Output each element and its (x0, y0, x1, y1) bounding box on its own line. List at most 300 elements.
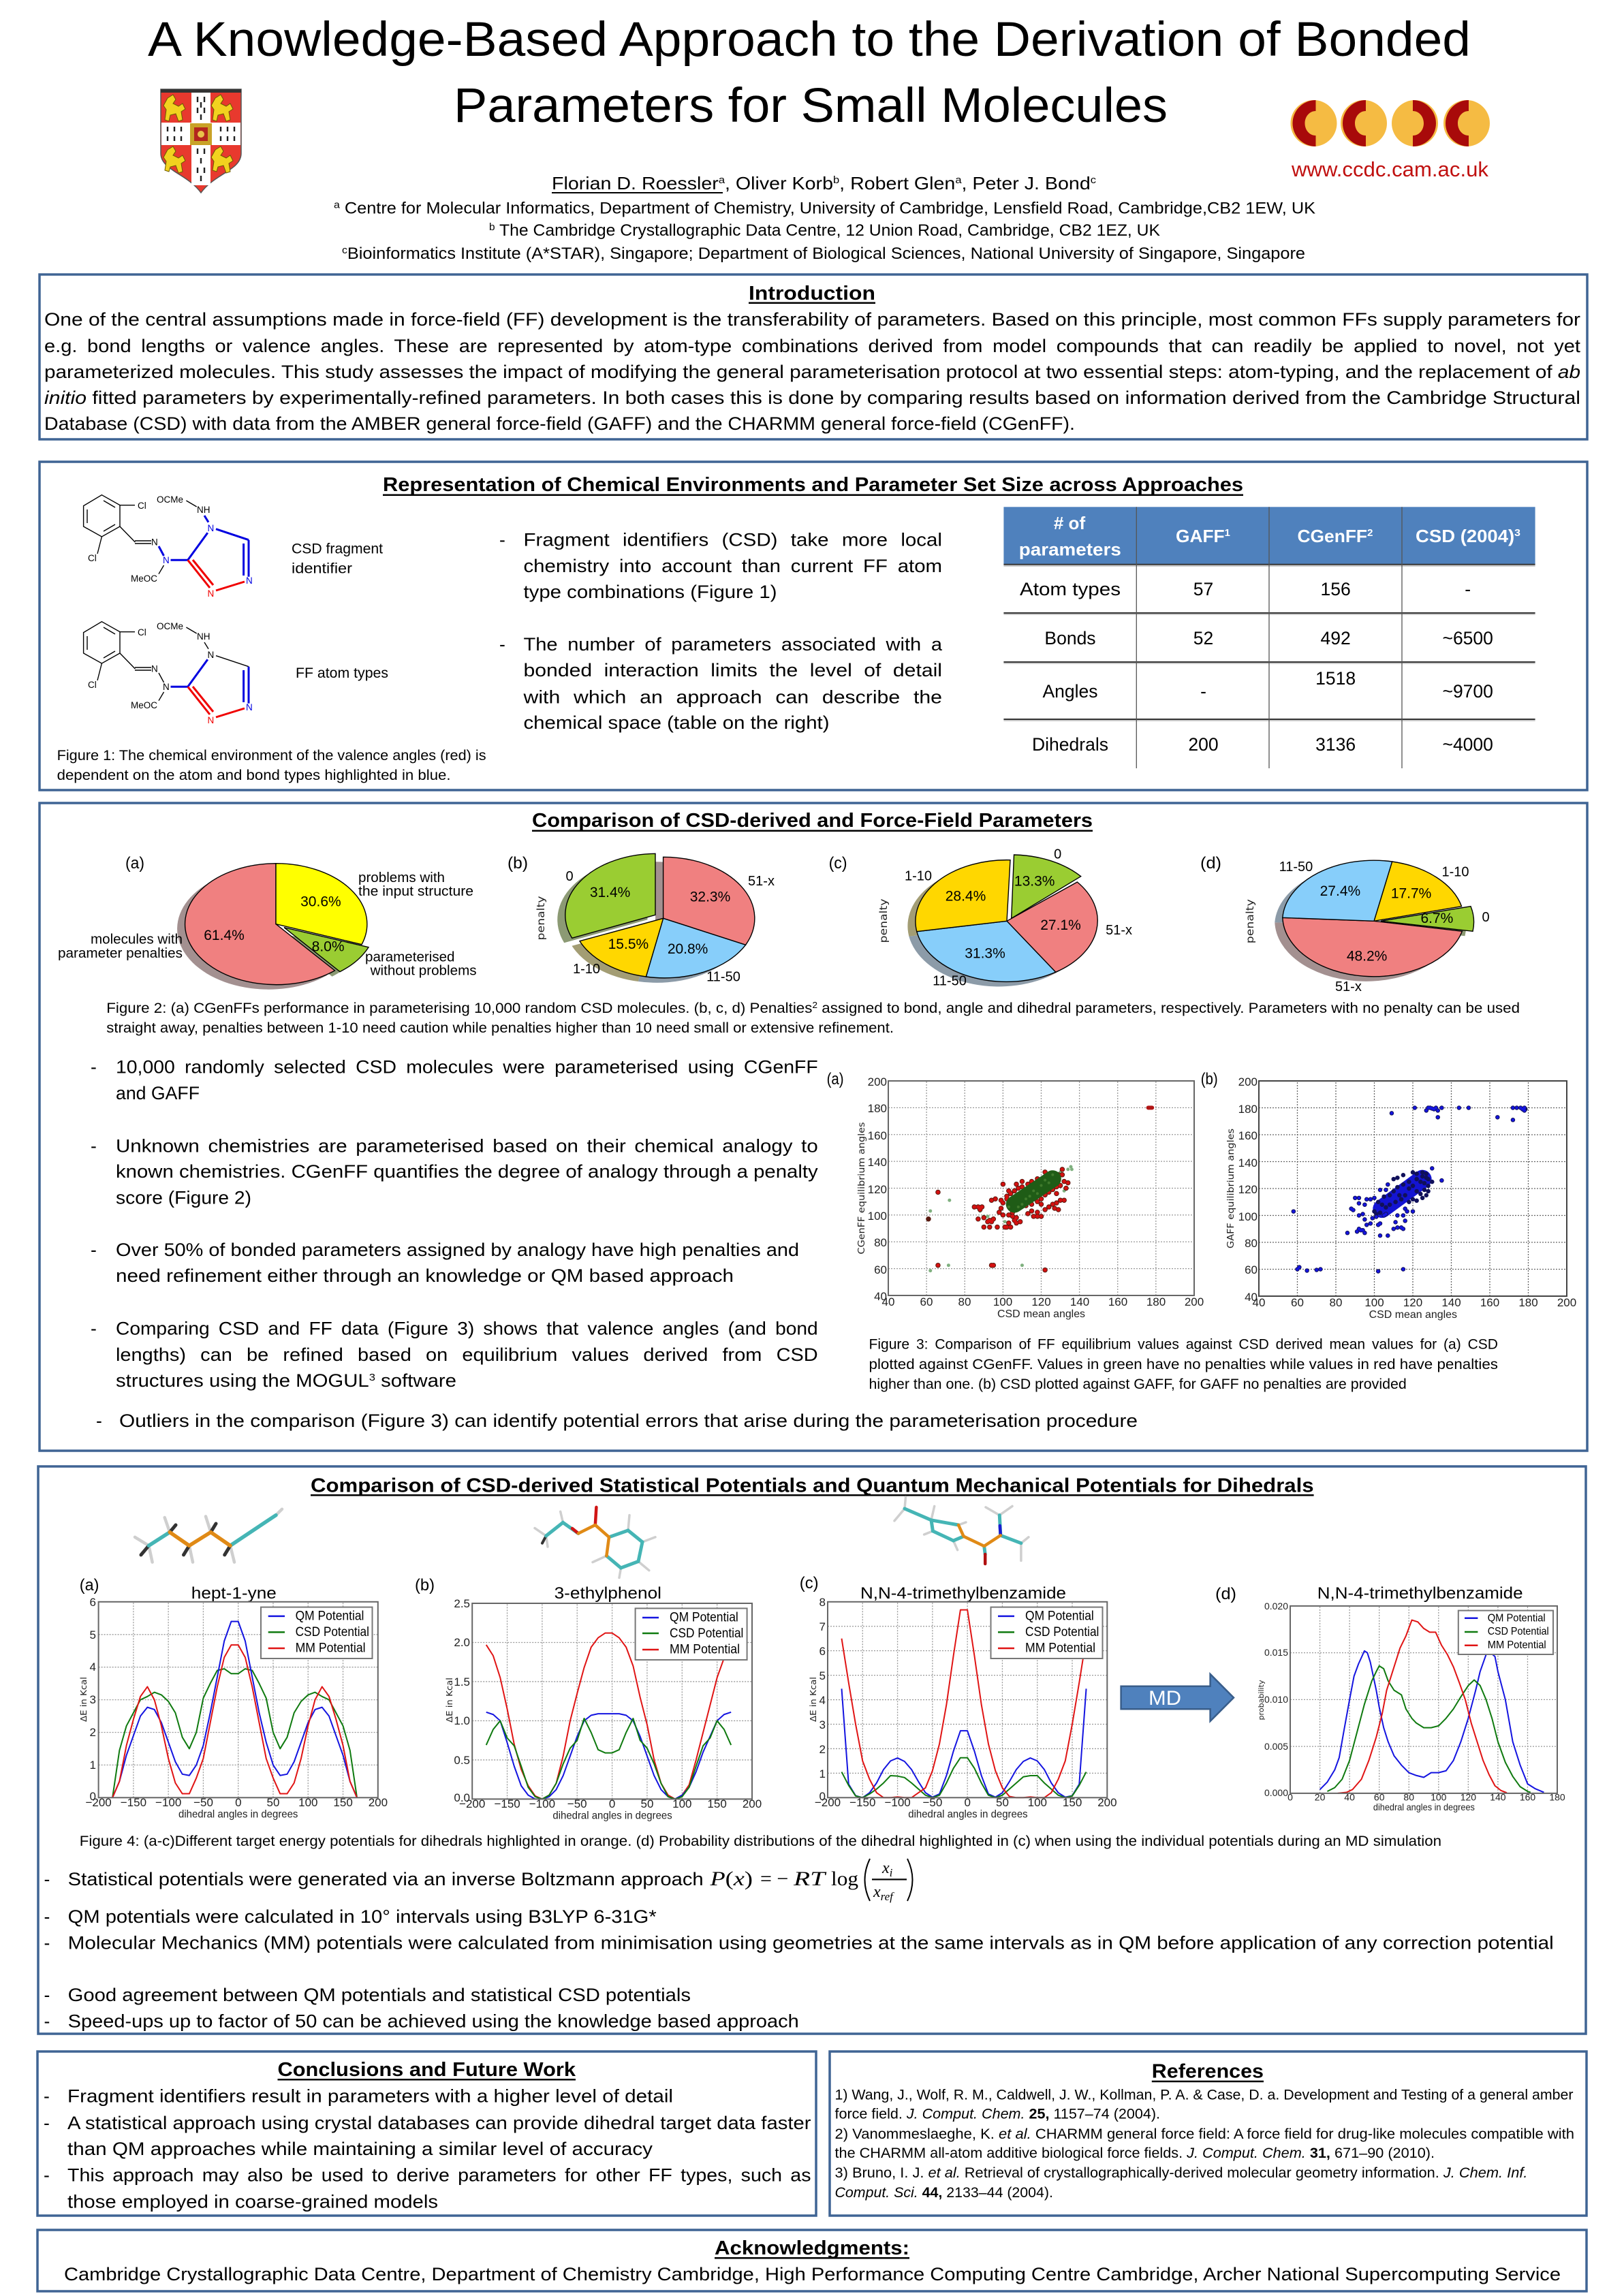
line chart (b): 3-ethylphenol: 50 (641, 1797, 653, 1810)
line chart (a): hept-1-yne: 2 (90, 1726, 96, 1739)
pie chart (a) (58, 854, 477, 990)
caption: figure 4: Figure 4: (a-c)Different target energy potentials for dihedrals highlighted in orange. (d) Probability distributions of the dihedral highlighted in (c) when using the individual potentials during an MD simulation (80, 1834, 1441, 1849)
line chart (b): 3-ethylphenol: 0.0 (454, 1791, 470, 1804)
line chart (a): hept-1-yne: 150 (333, 1796, 353, 1809)
text block: fragment identifier bullets: Fragment identifiers (CSD) take more local (523, 530, 942, 550)
icon: University of Cambridge shield (161, 89, 241, 193)
line chart (c): N,N-4-trimethylbenzamide: 200 (1097, 1796, 1117, 1809)
line chart (b): 3-ethylphenol: 0 (609, 1797, 615, 1810)
affiliations: a (334, 199, 340, 211)
chemical structure: FF atom types: Cl (88, 680, 97, 690)
scatter plot (b): CSD vs GAFF: 100 (1238, 1210, 1258, 1223)
scatter plot (b): CSD vs GAFF: 200 (1238, 1075, 1258, 1088)
line chart (d): probability distributions: (d) (1215, 1585, 1236, 1603)
caption: figure 1: dependent on the atom and bond types highlighted in blue. (57, 768, 451, 783)
line chart (d): probability distributions: 0 (1287, 1792, 1293, 1803)
chemical structure: CSD fragment identifier: N (163, 555, 170, 565)
line chart (d): probability distributions: dihedral angles in degrees (1373, 1802, 1475, 1812)
line chart (b): 3-ethylphenol: 200 (743, 1797, 762, 1810)
pie chart (c): 1-10 (905, 869, 932, 884)
title: A Knowledge-Based Approach to the Derivation of Bonded (148, 13, 1471, 67)
line chart (a): hept-1-yne: 0 (90, 1790, 96, 1803)
line chart (a): hept-1-yne: (a) (80, 1576, 99, 1594)
line chart (d): probability distributions: 160 (1520, 1792, 1535, 1803)
line chart (d): probability distributions: CSD Potential (1488, 1626, 1549, 1637)
formula: inverse Boltzmann: RT (793, 1868, 827, 1890)
authors: , Peter J. Bond (962, 173, 1091, 193)
line chart (a): hept-1-yne: MM Potential (296, 1641, 366, 1656)
line chart (a): hept-1-yne: 50 (267, 1796, 279, 1809)
formula: inverse Boltzmann (709, 1859, 913, 1903)
text block: introduction body (44, 309, 1581, 434)
table: number of parameters: Dihedrals (1032, 734, 1108, 755)
line chart (a): hept-1-yne: 6 (90, 1596, 96, 1609)
chemical structure: FF atom types: NH (197, 631, 210, 642)
panel: acknowledgments (37, 2230, 1587, 2291)
caption: figure 3: higher than one. (b) CSD plotted against GAFF, for GAFF no penalties are provided (869, 1377, 1407, 1392)
text block: fragment identifier bullets: chemistry into account than current FF atom (523, 556, 942, 576)
label: FF atom types: FF atom types (296, 665, 388, 681)
text block: fragment identifier bullets: chemical space (table on the right) (523, 712, 830, 733)
scatter plot (b): CSD vs GAFF: 120 (1403, 1296, 1422, 1309)
text block: parameterisation bullets: software (375, 1370, 456, 1391)
text block: parameterisation bullets: known chemistries. CGenFF quantifies the degree of analogy through a penalty (116, 1161, 819, 1182)
line chart (d): probability distributions: 100 (1431, 1792, 1447, 1803)
authors: b (833, 174, 839, 186)
scatter plot (b): CSD vs GAFF: 180 (1518, 1296, 1538, 1309)
pie chart (a): 30.6% (300, 894, 341, 910)
text block: parameterisation bullets: Comparing CSD and FF data (Figure 3) shows that valence angles (and bond (116, 1319, 818, 1339)
pie chart (b): 0 (565, 869, 574, 884)
line chart (c): N,N-4-trimethylbenzamide: 1 (819, 1767, 826, 1780)
scatter plot (a): CSD vs CGenFF: 80 (874, 1236, 887, 1249)
pie chart (c): (c) (829, 854, 847, 872)
text block: fragment identifier bullets (499, 530, 942, 733)
line chart (b): 3-ethylphenol: −200 (459, 1797, 485, 1810)
line chart (a): hept-1-yne: QM Potential (296, 1609, 364, 1624)
scatter plot (a): CSD vs CGenFF: 120 (868, 1183, 887, 1196)
line chart (c): N,N-4-trimethylbenzamide: 6 (819, 1645, 826, 1658)
title: Parameters for Small Molecules (454, 79, 1168, 133)
scatter plot (b): CSD vs GAFF: 200 (1557, 1296, 1576, 1309)
table: number of parameters: ~6500 (1442, 628, 1493, 648)
formula: inverse Boltzmann: ref (881, 1890, 894, 1903)
heading: introduction: Introduction (749, 283, 875, 304)
text block: reference list: 2) Vanommeslaeghe, K. et al. CHARMM general force field: A force field for drug-like molecules compatible with (835, 2126, 1574, 2142)
pie chart (a): parameterised (365, 950, 455, 965)
scatter plot (a): CSD vs CGenFF: 180 (868, 1102, 887, 1115)
authors: a (955, 174, 962, 186)
line chart (d): probability distributions: 0.000 (1264, 1787, 1288, 1798)
text block: fragment identifier bullets: type combinations (Figure 1) (523, 582, 777, 602)
icon: CCDC logo (1290, 100, 1490, 181)
table: number of parameters: CSD (2004) (1416, 526, 1509, 546)
text block: fragment identifier bullets: bonded interaction limits the level of detail (523, 660, 942, 680)
text block: potential bullets: - (44, 1906, 50, 1927)
text block: reference list: the CHARMM all-atom additive biological force fields. J. Comput. Chem. 31, 671–90 (2010). (835, 2145, 1435, 2161)
text block: potential bullets: QM potentials were calculated in 10° intervals using B3LYP 6-31G* (68, 1906, 657, 1927)
pie chart (c): penalty (877, 898, 890, 943)
line chart (c): N,N-4-trimethylbenzamide: 0 (819, 1790, 826, 1803)
label: CSD fragment identifier: CSD fragment (292, 541, 383, 557)
line chart (c): N,N-4-trimethylbenzamide: 100 (1028, 1796, 1047, 1809)
chemical structure: FF atom types: MeOC (131, 700, 157, 710)
text block: parameterisation bullets: Outliers in the comparison (Figure 3) can identify potential errors that arise during the parameterisation procedure (119, 1411, 1138, 1431)
line chart (b): 3-ethylphenol: −150 (494, 1797, 520, 1810)
scatter plot (b): CSD vs GAFF: 80 (1330, 1296, 1342, 1309)
table: number of parameters: 2 (1367, 527, 1373, 539)
line chart (a): hept-1-yne (78, 1576, 388, 1821)
text block: fragment identifier bullets: with which an approach can describe the (522, 687, 942, 708)
pie chart (a): molecules with (91, 932, 183, 947)
table: number of parameters: - (1200, 681, 1206, 702)
text block: parameterisation bullets: 3 (369, 1372, 375, 1383)
text block: conclusions bullets: A statistical approach using crystal databases can provide dihedral target data faster (67, 2113, 811, 2133)
pie chart (a): 8.0% (312, 939, 345, 955)
scatter plot (b): CSD vs GAFF: 100 (1364, 1296, 1384, 1309)
line chart (b): 3-ethylphenol: MM Potential (670, 1643, 740, 1657)
formula: inverse Boltzmann: i (890, 1866, 893, 1879)
line chart (d): probability distributions: 80 (1403, 1792, 1414, 1803)
line chart (d): probability distributions: 60 (1374, 1792, 1385, 1803)
label: CSD fragment identifier (292, 541, 383, 577)
line chart (a): hept-1-yne: hept-1-yne (191, 1584, 277, 1603)
line chart (b): 3-ethylphenol: −50 (567, 1797, 587, 1810)
chemical structure: CSD fragment identifier: N (207, 523, 214, 533)
line chart (b): 3-ethylphenol: 0.5 (454, 1754, 470, 1767)
line chart (b): 3-ethylphenol (415, 1576, 762, 1821)
line chart (d): probability distributions: 180 (1549, 1792, 1565, 1803)
authors: Florian D. Roessler (552, 173, 704, 193)
text block: fragment identifier bullets: - (499, 530, 505, 550)
chemical structure: CSD fragment identifier: NH (197, 505, 210, 515)
scatter plot (b): CSD vs GAFF: 140 (1441, 1296, 1461, 1309)
text block: conclusions bullets (44, 2086, 811, 2212)
scatter plot (a): CSD vs CGenFF: 140 (868, 1156, 887, 1169)
heading: comparison of statistical and QM potentials: Comparison of CSD-derived Statistical Potentials and Quantum Mechanical Potentials for Dihedrals (311, 1475, 1314, 1497)
table: number of parameters: CGenFF (1297, 526, 1367, 546)
text block: conclusions bullets: Fragment identifiers result in parameters with a higher level of detail (67, 2086, 673, 2107)
molecule: hept-1-yne (135, 1509, 282, 1562)
pie chart (d): 11-50 (1279, 860, 1313, 875)
text block: introduction body: e.g. bond lengths or valence angles. These are represented by atom-type combinations derived from model compounds that can readily be applied to novel, not yet (44, 336, 1581, 356)
panel: conclusions and future work (37, 2051, 816, 2216)
scatter plot (a): CSD vs CGenFF: 200 (1185, 1295, 1204, 1308)
table: number of parameters: 156 (1320, 579, 1351, 599)
label: CSD fragment identifier: identifier (292, 561, 352, 577)
table: number of parameters: ~4000 (1442, 734, 1493, 755)
text block: potential bullets: Speed-ups up to factor of 50 can be achieved using the knowledge based approach (68, 2011, 799, 2032)
heading: acknowledgments: Acknowledgments: (715, 2237, 909, 2259)
chemical structure: CSD fragment identifier: OCMe (157, 494, 183, 505)
pie chart (d) (1200, 854, 1490, 994)
pie chart (d): 6.7% (1420, 911, 1453, 926)
affiliations: The Cambridge Crystallographic Data Centre, 12 Union Road, Cambridge, CB2 1EZ, UK (495, 221, 1160, 240)
line chart (c): N,N-4-trimethylbenzamide: −200 (815, 1796, 841, 1809)
scatter plot (b): CSD vs GAFF: 40 (1253, 1296, 1265, 1309)
text block: parameterisation bullets: and GAFF (116, 1083, 200, 1103)
text block: introduction body: parameterized molecules. This study assesses the impact of modifying the general parameterisation protocol at two essential steps: atom-typing, and the replacement of ab (44, 362, 1580, 382)
scatter plot (b): CSD vs GAFF (1201, 1070, 1576, 1321)
line chart (b): 3-ethylphenol: CSD Potential (670, 1626, 743, 1641)
authors: a (719, 174, 725, 186)
line chart (b): 3-ethylphenol: ΔE in Kcal (444, 1678, 454, 1723)
line chart (a): hept-1-yne: CSD Potential (296, 1625, 369, 1639)
pie chart (a): without problems (370, 964, 477, 979)
line chart (a): hept-1-yne: ΔE in Kcal (78, 1677, 89, 1722)
affiliations: c (342, 245, 347, 256)
table: number of parameters: - (1465, 579, 1471, 599)
pie chart (c): 28.4% (946, 889, 986, 905)
line chart (b): 3-ethylphenol: 150 (707, 1797, 727, 1810)
caption: figure 2: assigned to bond, angle and dihedral parameters, respectively. Parameters with no penalty can be used (817, 1001, 1520, 1016)
text block: parameterisation bullets (91, 1057, 1138, 1431)
heading: conclusions: Conclusions and Future Work (278, 2059, 576, 2081)
line chart (b): 3-ethylphenol: 3-ethylphenol (555, 1584, 661, 1603)
chemical structure: FF atom types: N (151, 663, 158, 674)
caption: figure 2: Figure 2: (a) CGenFFs performance in parameterising 10,000 random CSD molecules. (b, c, d) Penalties (106, 1001, 770, 1016)
scatter plot (a): CSD vs CGenFF: (a) (827, 1070, 844, 1088)
icon: CCDC logo: www.ccdc.cam.ac.uk (1291, 157, 1488, 181)
chemical structure: CSD fragment identifier: Cl (138, 501, 146, 511)
scatter plot (b): CSD vs GAFF: GAFF equilibrium angles (1226, 1129, 1236, 1248)
scatter plot (a): CSD vs CGenFF: CSD mean angles (997, 1308, 1085, 1320)
panel: statistical and quantum mechanical potentials for dihedrals (38, 1466, 1586, 2034)
pie chart (b): 20.8% (668, 941, 708, 957)
text block: parameterisation bullets: - (91, 1319, 97, 1339)
text block: conclusions bullets: - (44, 2165, 50, 2186)
line chart (c): N,N-4-trimethylbenzamide: −150 (849, 1796, 875, 1809)
chemical structure: FF atom types: N (207, 650, 214, 660)
text block: potential bullets: - (44, 1869, 50, 1889)
text block: parameterisation bullets: - (96, 1411, 102, 1431)
line chart (c): N,N-4-trimethylbenzamide: 4 (819, 1694, 826, 1707)
pie chart (a): the input structure (358, 884, 473, 899)
pie chart (a): 61.4% (204, 928, 245, 943)
chemical structure: FF atom types: OCMe (157, 621, 183, 631)
pie chart (c): 11-50 (933, 974, 967, 989)
scatter plot (a): CSD vs CGenFF: 160 (1108, 1295, 1127, 1308)
scatter plot (a): CSD vs CGenFF: 160 (868, 1129, 887, 1142)
scatter plot (b): CSD vs GAFF: (b) (1201, 1070, 1218, 1088)
line chart (b): 3-ethylphenol: (b) (415, 1576, 435, 1594)
chemical structure: CSD fragment identifier (84, 494, 253, 599)
scatter plot (a): CSD vs CGenFF (827, 1070, 1204, 1320)
line chart (a): hept-1-yne: 3 (90, 1693, 96, 1706)
pie chart (a): problems with (358, 870, 445, 885)
text block: conclusions bullets: those employed in coarse-grained models (67, 2192, 438, 2212)
line chart (c): N,N-4-trimethylbenzamide: QM Potential (1025, 1609, 1094, 1624)
scatter plot (b): CSD vs GAFF: 60 (1291, 1296, 1304, 1309)
text block: parameterisation bullets: 10,000 randomly selected CSD molecules were parameterised using CGenFF (116, 1057, 818, 1078)
line chart (c): N,N-4-trimethylbenzamide: 8 (819, 1596, 826, 1609)
heading: references: References (1152, 2061, 1264, 2083)
line chart (a): hept-1-yne: 1 (90, 1759, 96, 1772)
table: number of parameters (1003, 507, 1535, 768)
line chart (b): 3-ethylphenol: QM Potential (670, 1611, 738, 1625)
molecule: N,N-4-trimethylbenzamide (894, 1497, 1029, 1564)
line chart (a): hept-1-yne: −50 (193, 1796, 213, 1809)
line chart (a): hept-1-yne: 100 (298, 1796, 317, 1809)
caption: figure 1 (57, 748, 486, 783)
arrow: MD: MD (1149, 1687, 1181, 1710)
text block: reference list: 3) Bruno, I. J. et al. Retrieval of crystallographically-derived molecular geometry information. J. Chem. Inf. (835, 2165, 1527, 2181)
chemical structure: FF atom types: Cl (138, 627, 146, 638)
text block: parameterisation bullets: - (91, 1136, 97, 1157)
table: number of parameters: parameters (1019, 539, 1121, 560)
scatter plot (b): CSD vs GAFF: 160 (1238, 1129, 1258, 1142)
affiliations (334, 199, 1315, 263)
formula: inverse Boltzmann: = − (760, 1868, 788, 1890)
arrow: MD (1121, 1674, 1234, 1721)
line chart (d): probability distributions: 0.005 (1264, 1741, 1288, 1752)
line chart (c): N,N-4-trimethylbenzamide: 0 (964, 1796, 971, 1809)
text block: parameterisation bullets: Over 50% of bonded parameters assigned by analogy have high penalties and (116, 1240, 799, 1260)
chemical structure: FF atom types: N (246, 702, 253, 712)
pie chart (c): 51-x (1106, 923, 1132, 938)
line chart (c): N,N-4-trimethylbenzamide: CSD Potential (1025, 1625, 1099, 1639)
pie chart (c): 31.3% (965, 946, 1005, 962)
panel: introduction (40, 274, 1587, 439)
pie chart (d): 0 (1482, 910, 1490, 925)
line chart (a): hept-1-yne: −100 (155, 1796, 181, 1809)
scatter plot (a): CSD vs CGenFF: 120 (1031, 1295, 1051, 1308)
pie chart (a): (a) (125, 854, 144, 872)
line chart (c): N,N-4-trimethylbenzamide: 2 (819, 1743, 826, 1756)
line chart (d): probability distributions (1215, 1584, 1565, 1812)
pie chart (c): 27.1% (1040, 917, 1081, 933)
chemical structure: FF atom types: N (163, 682, 170, 692)
line chart (c): N,N-4-trimethylbenzamide: 7 (819, 1620, 826, 1633)
chemical structure: FF atom types: N (207, 715, 214, 725)
line chart (a): hept-1-yne: 200 (369, 1796, 388, 1809)
line chart (d): probability distributions: 0.010 (1264, 1694, 1288, 1705)
line chart (d): probability distributions: 0.015 (1264, 1647, 1288, 1658)
line chart (d): probability distributions: N,N-4-trimethylbenzamide (1317, 1584, 1523, 1603)
text block: parameterisation bullets: need refinement either through an knowledge or QM based approach (116, 1265, 734, 1286)
line chart (d): probability distributions: MM Potential (1488, 1639, 1546, 1651)
line chart (b): 3-ethylphenol: 1.0 (454, 1714, 470, 1727)
line chart (c): N,N-4-trimethylbenzamide: N,N-4-trimethylbenzamide (860, 1584, 1066, 1603)
text block: reference list: 1) Wang, J., Wolf, R. M., Caldwell, J. W., Kollman, P. A. & Case, D. a. Development and Testing of a general amber (835, 2088, 1574, 2103)
scatter plot (a): CSD vs CGenFF: 40 (882, 1295, 894, 1308)
line chart (d): probability distributions: 40 (1344, 1792, 1355, 1803)
text block: potential bullets: - (44, 1985, 50, 2005)
table: number of parameters: Bonds (1044, 628, 1096, 648)
chemical structure: CSD fragment identifier: N (207, 588, 214, 599)
line chart (b): 3-ethylphenol: 2.5 (454, 1597, 470, 1610)
authors: , Robert Glen (839, 173, 955, 193)
text block: potential bullets: - (44, 2011, 50, 2032)
chemical structure: CSD fragment identifier: N (246, 576, 253, 586)
pie chart (d): 17.7% (1391, 885, 1431, 901)
heading: representation of chemical environments: Representation of Chemical Environments and Parameter Set Size across Approaches (383, 474, 1243, 496)
scatter plot (a): CSD vs CGenFF: 140 (1070, 1295, 1089, 1308)
text block: parameterisation bullets: - (91, 1057, 97, 1078)
text block: parameterisation bullets: structures using the MOGUL (116, 1370, 345, 1391)
line chart (c): N,N-4-trimethylbenzamide: MM Potential (1025, 1641, 1095, 1656)
table: number of parameters: 3136 (1315, 734, 1356, 755)
line chart (b): 3-ethylphenol: 1.5 (454, 1676, 470, 1688)
text block: potential bullets: - (44, 1933, 50, 1953)
line chart (c): N,N-4-trimethylbenzamide: 3 (819, 1718, 826, 1731)
authors: , Oliver Korb (725, 173, 833, 193)
pie chart (b) (507, 853, 775, 985)
text block: parameterisation bullets: - (91, 1240, 97, 1260)
line chart (c): N,N-4-trimethylbenzamide: ΔE in Kcal (808, 1677, 818, 1722)
table: number of parameters: ~9700 (1442, 681, 1493, 702)
scatter plot (b): CSD vs GAFF: 60 (1245, 1263, 1258, 1276)
chemical structure: CSD fragment identifier: N (151, 537, 158, 548)
caption: figure 3: Figure 3: Comparison of FF equilibrium values against CSD derived mean values for (a) CSD (869, 1337, 1498, 1353)
table: number of parameters: Atom types (1020, 579, 1121, 599)
line chart (a): hept-1-yne: 0 (235, 1796, 242, 1809)
text block: reference list (835, 2088, 1574, 2201)
line chart (c): N,N-4-trimethylbenzamide: −100 (884, 1796, 911, 1809)
scatter plot (a): CSD vs CGenFF: 100 (868, 1210, 887, 1223)
line chart (d): probability distributions: probability (1258, 1680, 1266, 1720)
caption: figure 2: straight away, penalties between 1-10 need caution while penalties higher than 10 need small or extensive refinement. (106, 1020, 894, 1036)
table: number of parameters: 200 (1188, 734, 1219, 755)
pie chart (b): penalty (535, 896, 547, 940)
molecule: 3-ethylphenol (535, 1507, 655, 1577)
table: number of parameters: 492 (1320, 628, 1351, 648)
title (148, 13, 1471, 133)
line chart (c): N,N-4-trimethylbenzamide (800, 1574, 1117, 1821)
affiliations: Bioinformatics Institute (A*STAR), Singapore; Department of Biological Sciences, National University of Singapore, Singapore (347, 245, 1305, 263)
pie chart (c) (829, 847, 1132, 989)
line chart (c): N,N-4-trimethylbenzamide: 150 (1063, 1796, 1082, 1809)
text block: acknowledgments: Cambridge Crystallographic Data Centre, Department of Chemistry Cambridge, High Performance Computing Centre Cambridge, Archer National Supercomputing Service (64, 2264, 1561, 2284)
pie chart (d): 27.4% (1320, 883, 1360, 899)
pie chart (b): 32.3% (690, 889, 730, 905)
pie chart (b): 11-50 (706, 970, 740, 985)
authors (552, 173, 1097, 193)
chemical structure: CSD fragment identifier: Cl (88, 553, 97, 563)
pie chart (d): (d) (1200, 854, 1221, 872)
line chart (b): 3-ethylphenol: 100 (672, 1797, 691, 1810)
table: number of parameters: 1 (1225, 527, 1230, 539)
caption: figure 3: plotted against CGenFF. Values in green have no penalties while values in red have penalties (869, 1357, 1498, 1372)
heading: comparison of CSD-derived and force-field parameters: Comparison of CSD-derived and Force-Field Parameters (532, 810, 1093, 832)
scatter plot (a): CSD vs CGenFF: 40 (874, 1290, 887, 1303)
pie chart (b): 51-x (748, 874, 775, 889)
pie chart (c): 0 (1054, 847, 1061, 862)
line chart (c): N,N-4-trimethylbenzamide: 50 (996, 1796, 1009, 1809)
text block: parameterisation bullets: score (Figure 2) (116, 1188, 251, 1208)
line chart (c): N,N-4-trimethylbenzamide: −50 (922, 1796, 942, 1809)
text block: potential bullets (44, 1869, 1554, 2032)
panel: chemical environments and parameter set size (40, 462, 1587, 790)
table: number of parameters: 1518 (1315, 668, 1356, 689)
line chart (c): N,N-4-trimethylbenzamide: 5 (819, 1669, 826, 1682)
text block: fragment identifier bullets: The number of parameters associated with a (523, 634, 942, 655)
line chart (b): 3-ethylphenol: dihedral angles in degrees (552, 1810, 672, 1821)
pie chart (d): 51-x (1335, 979, 1362, 994)
text block: reference list: force field. J. Comput. Chem. 25, 1157–74 (2004). (835, 2107, 1160, 2122)
text block: fragment identifier bullets: - (499, 634, 505, 655)
text block: parameterisation bullets: lengths) can be refined based on equilibrium values derived from CSD (116, 1344, 818, 1365)
pie chart (c): 13.3% (1014, 874, 1055, 890)
text block: potential bullets: Statistical potentials were generated via an inverse Boltzmann approach (68, 1869, 704, 1889)
pie chart (b): 31.4% (590, 885, 630, 900)
pie chart (d): 1-10 (1441, 865, 1469, 880)
line chart (d): probability distributions: QM Potential (1488, 1613, 1546, 1624)
line chart (a): hept-1-yne: 5 (90, 1629, 96, 1641)
chemical structure: FF atom types (84, 621, 253, 725)
text block: potential bullets: Molecular Mechanics (MM) potentials were calculated from minimisation using geometries at the same intervals as in QM before application of any correction potential (68, 1933, 1554, 1953)
scatter plot (a): CSD vs CGenFF: 60 (874, 1263, 887, 1276)
